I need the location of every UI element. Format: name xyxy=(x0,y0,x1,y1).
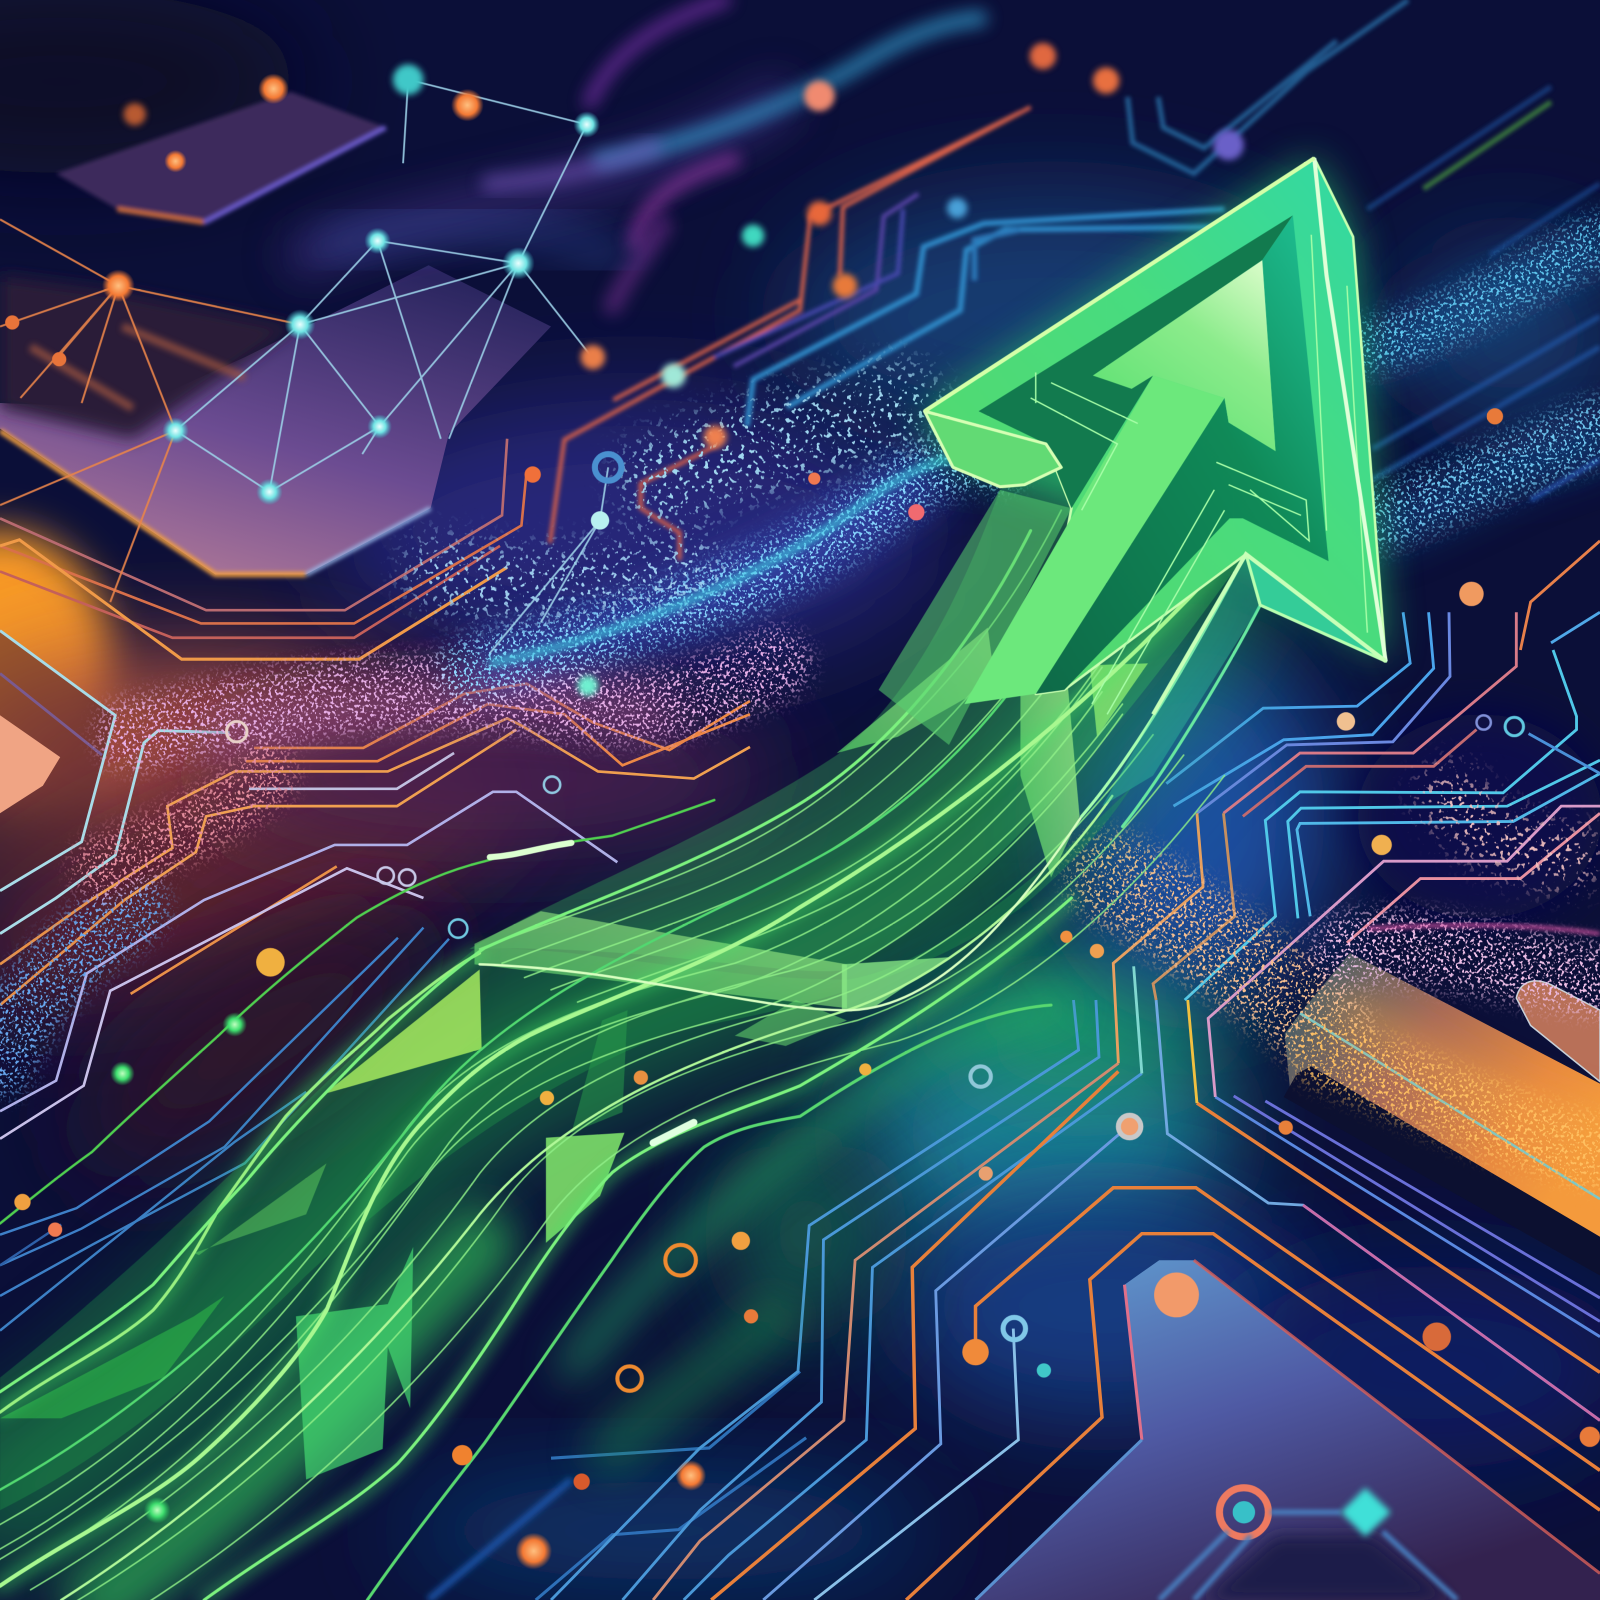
arrowhead: left recess xyxy=(979,215,1293,508)
green mist: under ribbon glow xyxy=(0,571,1214,1600)
plate: right orange xyxy=(1284,953,1600,1276)
node: teal top xyxy=(393,64,423,95)
green panes: translucent folded facets xyxy=(0,612,1148,1480)
traces: right stepped bundle xyxy=(1113,541,1600,1097)
arrowhead: bright left rim xyxy=(924,158,1314,411)
traces: bottom blue lines under ribbon xyxy=(429,1371,806,1600)
node: orange hub xyxy=(102,269,135,302)
node: cyan centre hub xyxy=(285,309,315,340)
traces: left-center orange bundle xyxy=(0,684,750,1005)
node: cyan right hub xyxy=(502,247,535,280)
traces: left purple outlines xyxy=(0,792,617,1139)
cyan wave crest xyxy=(490,454,980,663)
traces: bottom-middle blue bundle xyxy=(551,966,1142,1600)
traces: top-center blue bundle xyxy=(747,209,1255,427)
traces: lower-left blue lines xyxy=(0,928,449,1331)
node: cyan upper xyxy=(364,228,391,254)
arrowhead: right recess xyxy=(1036,215,1329,694)
particle wave: speckled bands xyxy=(0,240,1600,1153)
node: cyan left xyxy=(162,417,189,444)
traces: center orange zigzag xyxy=(550,107,1031,560)
arrowhead xyxy=(879,158,1386,806)
node: cyan small xyxy=(367,414,392,439)
traces: orange circuit outlines xyxy=(711,1071,1600,1600)
plate: top-left purple xyxy=(0,265,551,574)
arrowhead: bright right rim xyxy=(1314,158,1386,661)
plate: left orange xyxy=(0,631,115,891)
arrowhead: glow xyxy=(924,158,1386,661)
streaks: crisp lines xyxy=(0,531,1260,1600)
streaks: wide halo xyxy=(0,571,1214,1600)
particle haze: soft colour under speck bands xyxy=(224,102,1600,1133)
traces: top-left orange bundle xyxy=(0,439,527,659)
arrowhead: fine inner lines xyxy=(1031,235,1367,714)
green ribbon: lower translucent body xyxy=(0,786,1133,1510)
node: cyan lower xyxy=(256,479,283,505)
green streaks: glowing curves xyxy=(0,510,1260,1600)
traces: top-right blue bundle xyxy=(1128,0,1600,500)
arrowhead: outer crystal xyxy=(924,158,1386,694)
arrowhead: left shaft translucent xyxy=(879,490,1071,745)
arrowhead: lower-right facet xyxy=(1246,554,1386,661)
particle wave: top nebula xyxy=(337,0,980,306)
streaks: fine parallel lines along shaft and tail xyxy=(0,510,1224,1600)
node: teal diamond bottom-right xyxy=(1159,1488,1457,1600)
traces: left pale blue lines xyxy=(0,631,230,934)
plate: bottom xyxy=(976,1260,1600,1600)
ring pads: circuit connector rings xyxy=(227,454,1523,1537)
particle wave: sparse large specks xyxy=(439,408,1571,857)
arrowhead: shaft light band xyxy=(964,376,1224,704)
node: cyan top xyxy=(573,111,600,138)
arrowhead: wing bevel xyxy=(924,411,1061,487)
plate: top-left small xyxy=(56,92,386,222)
network graph: top-left constellation xyxy=(0,64,608,653)
green ribbon: arrow shaft translucent body xyxy=(469,376,1246,971)
arrowhead: inner bright arrow xyxy=(1093,260,1276,451)
arrowhead: right shaft translucent xyxy=(1102,554,1260,806)
traces: lower-right bundle xyxy=(1156,1000,1600,1420)
arrowhead: bright notch rim xyxy=(1153,554,1386,714)
pink particle line xyxy=(1367,925,1600,934)
